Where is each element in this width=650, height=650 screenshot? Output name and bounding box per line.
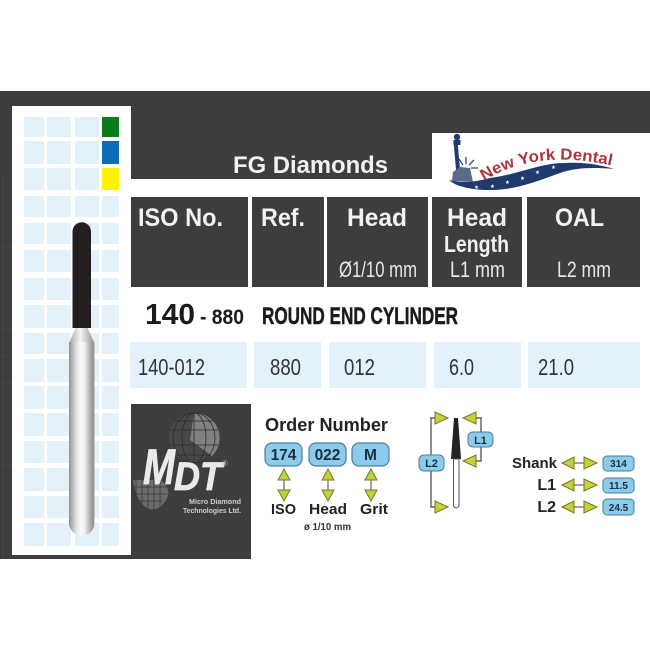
key labels: Shank [512, 455, 558, 472]
data row: 140-012 [138, 354, 205, 380]
key values: 24.5 [609, 503, 629, 514]
code labels: ISO [271, 501, 296, 518]
header: Head [327, 197, 428, 287]
stars [474, 164, 556, 191]
header: Head Length: Length [444, 231, 509, 257]
MDT wordmark: DT [174, 455, 225, 499]
globe [169, 413, 220, 463]
panel: bur colour chart [12, 106, 131, 555]
logo wordmark: New York Dental [479, 148, 613, 180]
statue of liberty mark [452, 134, 478, 182]
stars: ★ [490, 183, 495, 190]
dark page frame [0, 91, 650, 559]
product heading [145, 299, 458, 331]
grid cells [24, 117, 119, 546]
code pills: 022 [315, 447, 340, 464]
product heading: 140 [145, 299, 195, 331]
key values: 314 [610, 459, 627, 470]
shank and length key [512, 455, 634, 516]
company name: Micro Diamond [189, 499, 241, 506]
header: OAL: L2 mm [557, 257, 611, 282]
stars: ★ [551, 164, 556, 171]
key labels [512, 455, 558, 516]
bracket arrows [435, 412, 476, 513]
stars: ★ [505, 179, 510, 186]
product heading: ROUND END CYLINDER [262, 303, 458, 330]
header: Head Length: L1 mm [450, 257, 505, 282]
stars: ★ [520, 175, 525, 182]
code pills: M [364, 447, 377, 464]
L1 tag: L1 [474, 435, 487, 447]
company name second line: Technologies Ltd. [183, 508, 241, 515]
product heading: - 880 [200, 306, 244, 329]
bur illustration [69, 222, 94, 536]
header: Ref.: Ref. [261, 204, 305, 232]
code pills [265, 443, 389, 466]
stars: ★ [474, 184, 479, 191]
code labels: Head [309, 501, 347, 518]
data row: 6.0 [449, 354, 474, 380]
header: Head Length [432, 197, 522, 287]
header: OAL [527, 197, 640, 287]
header: ISO No.: ISO No. [138, 204, 223, 232]
lower globe segment [133, 480, 168, 511]
data row: 012 [344, 354, 375, 380]
stars: ★ [535, 169, 540, 176]
registered mark: ® [222, 459, 228, 468]
header: Ref. [252, 197, 324, 287]
order number key [265, 415, 389, 533]
MDT wordmark: M [143, 439, 176, 495]
logo: New York Dental [449, 134, 614, 191]
panel: product title: FG Diamonds [233, 152, 388, 179]
table header [131, 197, 640, 287]
data row: 880 [270, 354, 301, 380]
heading: Order Number [265, 415, 388, 435]
code labels: Grit [360, 501, 388, 518]
key labels: L1 [537, 477, 556, 494]
header: ISO No. [131, 197, 248, 287]
small bur [451, 418, 461, 508]
code labels [271, 501, 388, 518]
header: OAL: OAL [555, 204, 604, 232]
header: Head Length: Head [447, 204, 507, 232]
dimension diagram [419, 412, 493, 513]
code pills: 174 [271, 447, 297, 464]
key arrows [562, 457, 597, 513]
diameter unit: ø 1/10 mm [304, 521, 351, 533]
panel: MDT logo [131, 404, 251, 559]
key values [603, 456, 634, 515]
L2 tag: L2 [425, 458, 438, 470]
grit colour swatches [102, 117, 119, 190]
panel: product title [131, 133, 432, 179]
data row: 21.0 [538, 354, 574, 380]
header: Head: Ø1/10 mm [339, 257, 417, 282]
data row [130, 342, 640, 388]
key values: 11.5 [609, 481, 628, 492]
dimension brackets [431, 418, 481, 507]
MDT wordmark [143, 439, 225, 499]
double arrows [278, 469, 377, 501]
header: Head: Head [347, 204, 407, 232]
key labels: L2 [537, 499, 556, 516]
flag swoosh [449, 163, 614, 190]
